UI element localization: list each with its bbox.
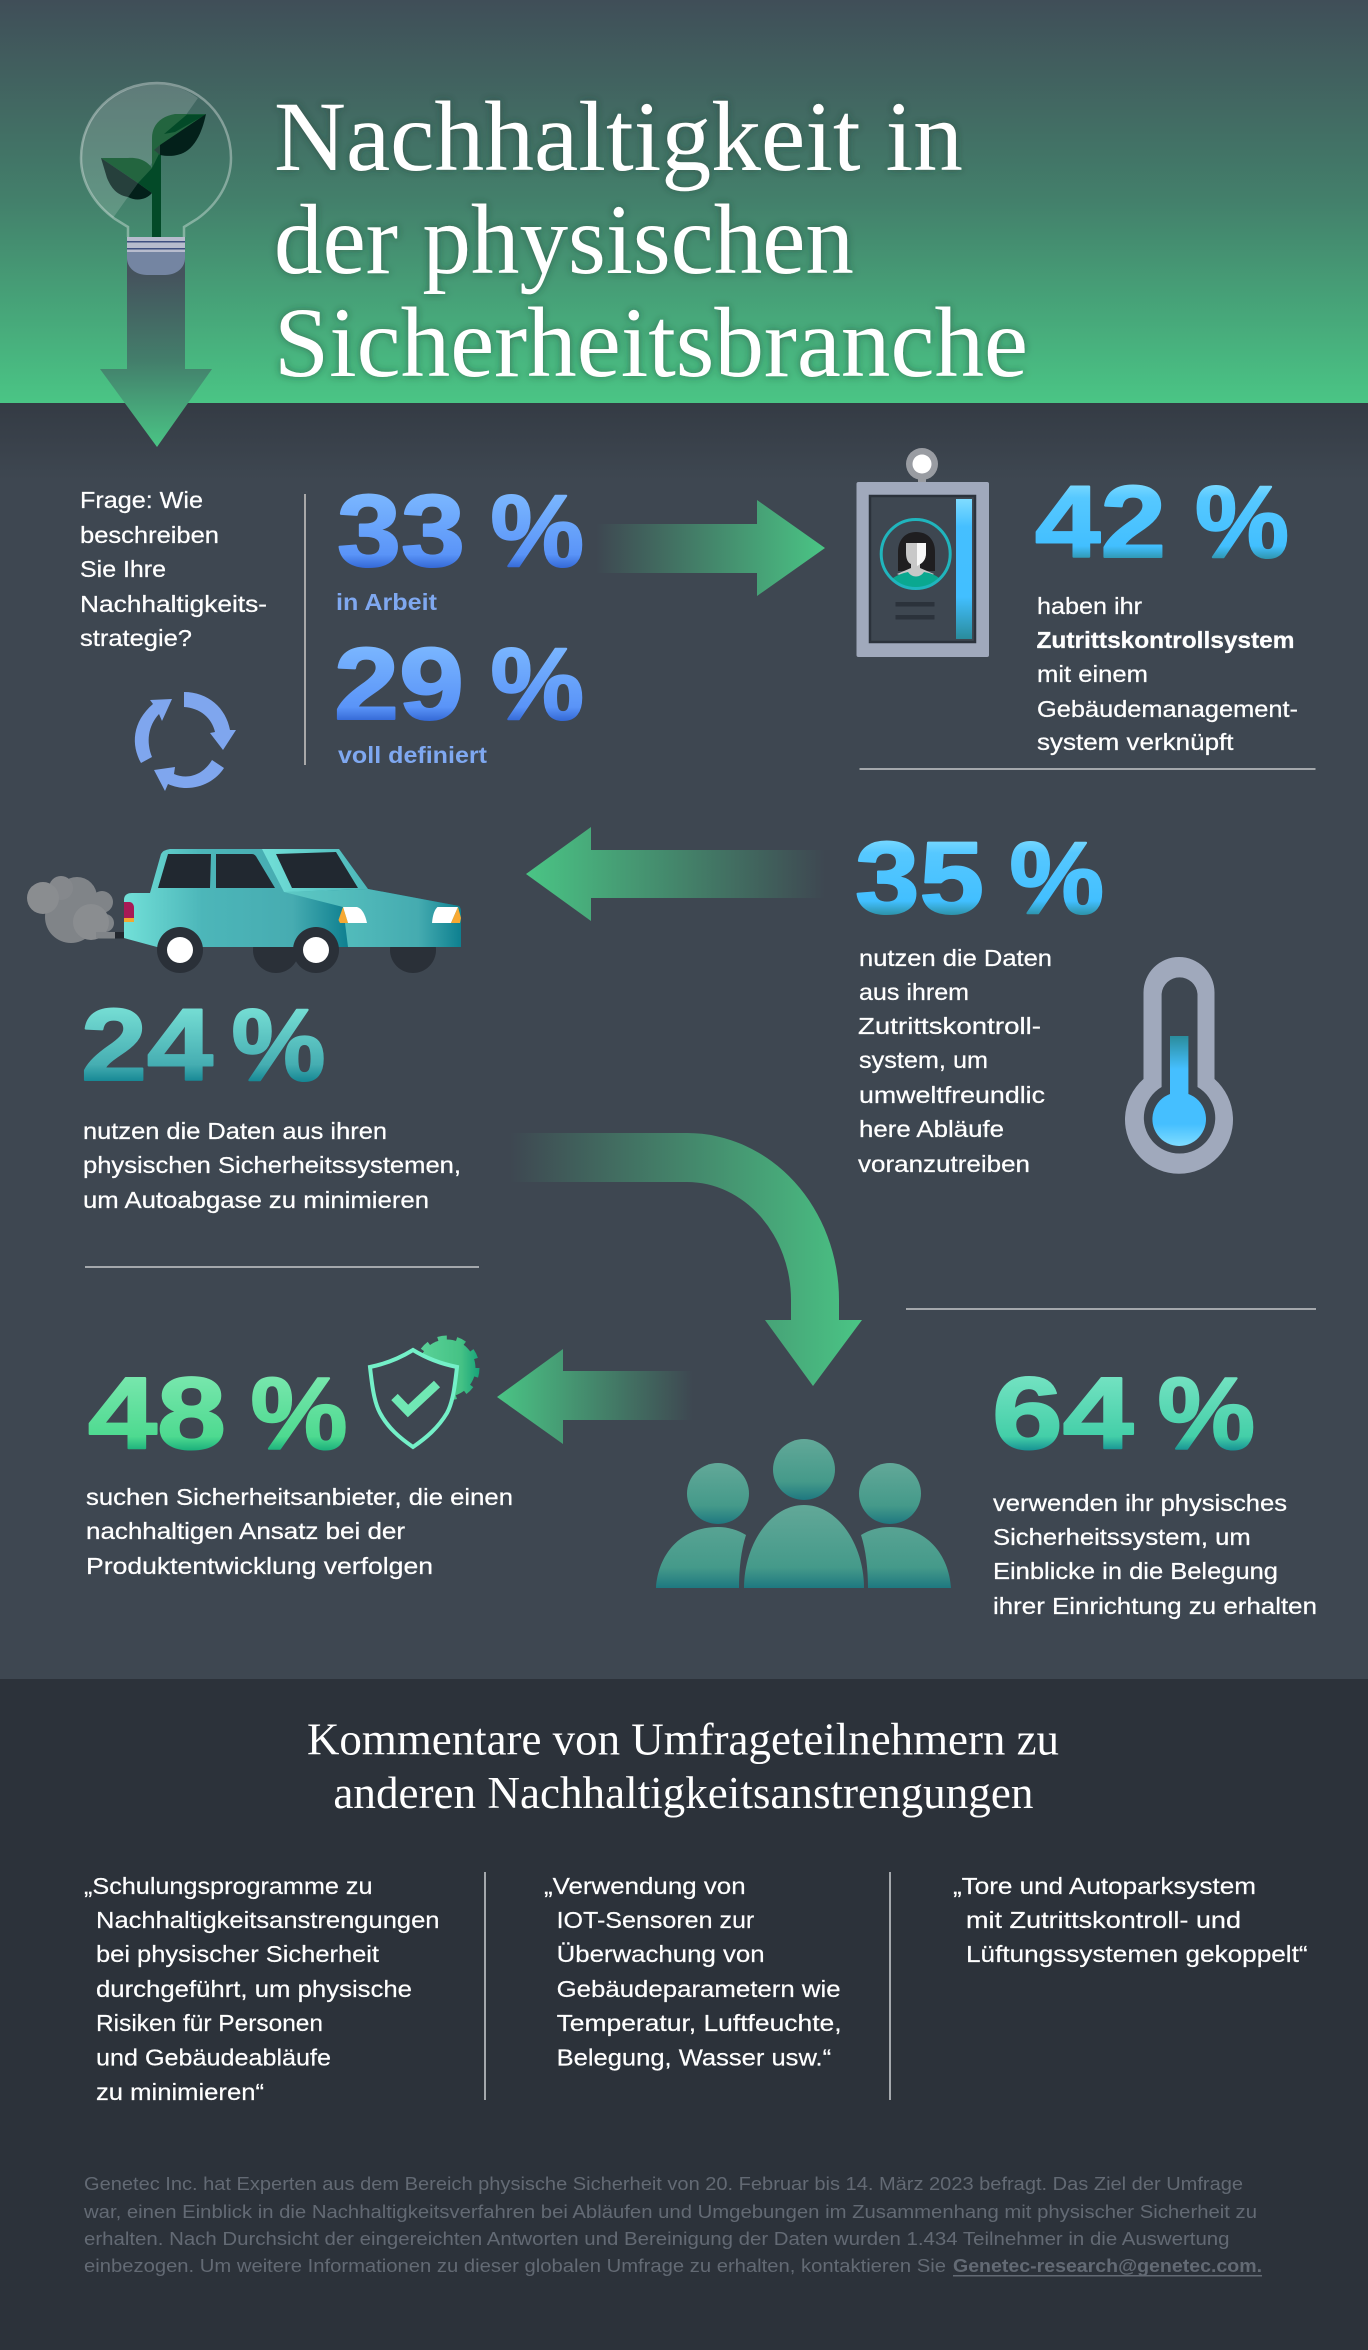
heading: comments: Kommentare von Umfrageteilnehmern zu [307, 1714, 1059, 1764]
quote: column 3: Lüftungssystemen gekoppelt“ [966, 1941, 1308, 1967]
text: 35 % description: Zutrittskontroll- [858, 1013, 1041, 1039]
footnote: survey methodology: erhalten. Nach Durchsicht der eingereichten Antworten und Bereinigung der Daten wurden 1.434 Teilnehmer in die Auswertung [84, 2228, 1230, 2249]
text: 35 % description: nutzen die Daten [859, 945, 1052, 971]
text: 42 % description: Gebäudemanagement- [1037, 696, 1298, 722]
quote: column 2: Überwachung von [557, 1941, 765, 1967]
text: 24 % description: nutzen die Daten aus ihren [83, 1118, 387, 1144]
icon: shield with gear [370, 1338, 477, 1447]
question text: Frage: Wie [80, 487, 203, 513]
icon: ID badge [856, 448, 989, 657]
stat: 48 % [88, 1356, 348, 1470]
text: 24 % description [83, 1118, 461, 1213]
heading: comments [307, 1714, 1059, 1818]
arrow: left to shield [497, 1349, 693, 1444]
question text: beschreiben [80, 522, 219, 548]
text: 35 % description: umweltfreundlic [859, 1082, 1045, 1108]
quote: column 1: Risiken für Personen [96, 2010, 323, 2036]
text: 48 % description [86, 1484, 513, 1579]
stat: 24 % [81, 988, 326, 1102]
text: 64 % description: Einblicke in die Belegung [993, 1558, 1278, 1584]
text: 48 % description: Produktentwicklung verfolgen [86, 1553, 433, 1579]
text: 42 % description: Zutrittskontrollsystem [1036, 627, 1294, 653]
quote: column 1: und Gebäudeabläufe [96, 2044, 331, 2070]
quote: column 1: zu minimieren“ [96, 2079, 264, 2105]
stat: 35 %: 35 [855, 821, 984, 935]
text: 64 % description: Sicherheitssystem, um [993, 1524, 1251, 1550]
arrow: bulb down arrow [100, 250, 212, 447]
text: 24 % description: um Autoabgase zu minimieren [83, 1187, 429, 1213]
quote: column 2: Gebäudeparametern wie [557, 1976, 841, 2002]
arrow: left to car [526, 827, 825, 921]
title: Sicherheitsbranche [274, 287, 1028, 398]
stat: 24 %: 24 [81, 988, 213, 1102]
icon: thermometer [1125, 957, 1233, 1174]
icon: recycle arrows [135, 692, 236, 791]
footnote: survey methodology: Genetec Inc. hat Experten aus dem Bereich physische Sicherheit von 20. Februar bis 14. März 2023 befragt. Das Ziel der Umfrage [84, 2173, 1243, 2194]
question text [80, 487, 267, 651]
text: 42 % description: system verknüpft [1037, 729, 1234, 755]
heading: comments: anderen Nachhaltigkeitsanstrengungen [333, 1768, 1033, 1818]
text: 35 % description: here Abläufe [859, 1116, 1004, 1142]
title [274, 81, 1028, 398]
quote: column 2: „Verwendung von [544, 1873, 746, 1899]
quote: column 3: mit Zutrittskontroll- und [966, 1907, 1241, 1933]
text: 42 % description: mit einem [1037, 661, 1148, 687]
quote: column 3: „Tore und Autoparksystem [953, 1873, 1256, 1899]
stat: 35 %: % [1010, 821, 1104, 935]
text: 48 % description: nachhaltigen Ansatz bei der [86, 1518, 405, 1544]
title: Nachhaltigkeit in [274, 81, 963, 192]
question text: Nachhaltigkeits- [80, 591, 267, 617]
panel: comments footer [0, 1679, 1368, 2350]
stat: 42 % [1035, 465, 1289, 579]
stat: 29 %: % [490, 627, 584, 741]
icon: people group [656, 1439, 951, 1588]
question text: Sie Ihre [80, 556, 166, 582]
stat: 48 %: % [250, 1356, 348, 1470]
quote: column 3 [953, 1873, 1308, 1967]
text: 48 % description: suchen Sicherheitsanbieter, die einen [86, 1484, 513, 1510]
label: voll definiert: voll definiert [338, 742, 487, 768]
quote: column 2 [544, 1873, 842, 2070]
stat: 42 %: 42 [1035, 465, 1166, 579]
stat: 33 %: 33 [337, 474, 465, 588]
text: 35 % description: aus ihrem [859, 979, 969, 1005]
question text: strategie? [80, 625, 192, 651]
stat: 33 % [337, 474, 584, 588]
stat: 48 %: 48 [88, 1356, 226, 1470]
stat: 64 % [992, 1356, 1255, 1470]
text: 35 % description: system, um [859, 1047, 988, 1073]
text: 42 % description [1036, 593, 1298, 755]
quote: column 1: durchgeführt, um physische [96, 1976, 412, 2002]
quote: column 2: IOT-Sensoren zur [557, 1907, 755, 1933]
text: 42 % description: haben ihr [1037, 593, 1142, 619]
stat: 33 %: % [490, 474, 584, 588]
quote: column 2: Temperatur, Luftfeuchte, [557, 2010, 842, 2036]
quote: column 1: „Schulungsprogramme zu [84, 1873, 372, 1899]
footnote: survey methodology: war, einen Einblick in die Nachhaltigkeitsverfahren bei Abläufen und Umgebungen im Zusammenhang mit physischer Sicherheit zu [83, 2201, 1257, 2222]
text: 64 % description: ihrer Einrichtung zu erhalten [993, 1593, 1317, 1619]
footnote: survey methodology [83, 2173, 1262, 2276]
footnote: survey methodology: Genetec-research@genetec.com. [953, 2255, 1262, 2276]
text: 64 % description [993, 1490, 1317, 1619]
arrow: right to badge [596, 500, 825, 596]
text: 35 % description [858, 945, 1052, 1177]
title: der physischen [274, 184, 854, 295]
label: in Arbeit: in Arbeit [336, 589, 437, 615]
icon: car with exhaust smoke [27, 849, 461, 973]
text: 24 % description: physischen Sicherheitssystemen, [83, 1152, 461, 1178]
icon: light bulb with plant [81, 83, 231, 275]
stat: 24 %: % [232, 988, 326, 1102]
text: 35 % description: voranzutreiben [858, 1151, 1030, 1177]
stat: 35 % [855, 821, 1104, 935]
quote: column 1 [84, 1873, 440, 2105]
stat: 42 %: % [1195, 465, 1289, 579]
quote: column 2: Belegung, Wasser usw.“ [557, 2044, 831, 2070]
header band [0, 0, 1368, 403]
quote: column 1: Nachhaltigkeitsanstrengungen [96, 1907, 440, 1933]
stat: 29 % [334, 627, 584, 741]
stat: 64 %: 64 [992, 1356, 1134, 1470]
stat: 29 %: 29 [334, 627, 464, 741]
quote: column 1: bei physischer Sicherheit [96, 1941, 380, 1967]
footnote: survey methodology: einbezogen. Um weitere Informationen zu dieser globalen Umfrage zu erhalten, kontaktieren Sie [84, 2255, 946, 2276]
text: 64 % description: verwenden ihr physisches [993, 1490, 1287, 1516]
stat: 64 %: % [1158, 1356, 1255, 1470]
arrow: curved down to people [510, 1133, 862, 1386]
